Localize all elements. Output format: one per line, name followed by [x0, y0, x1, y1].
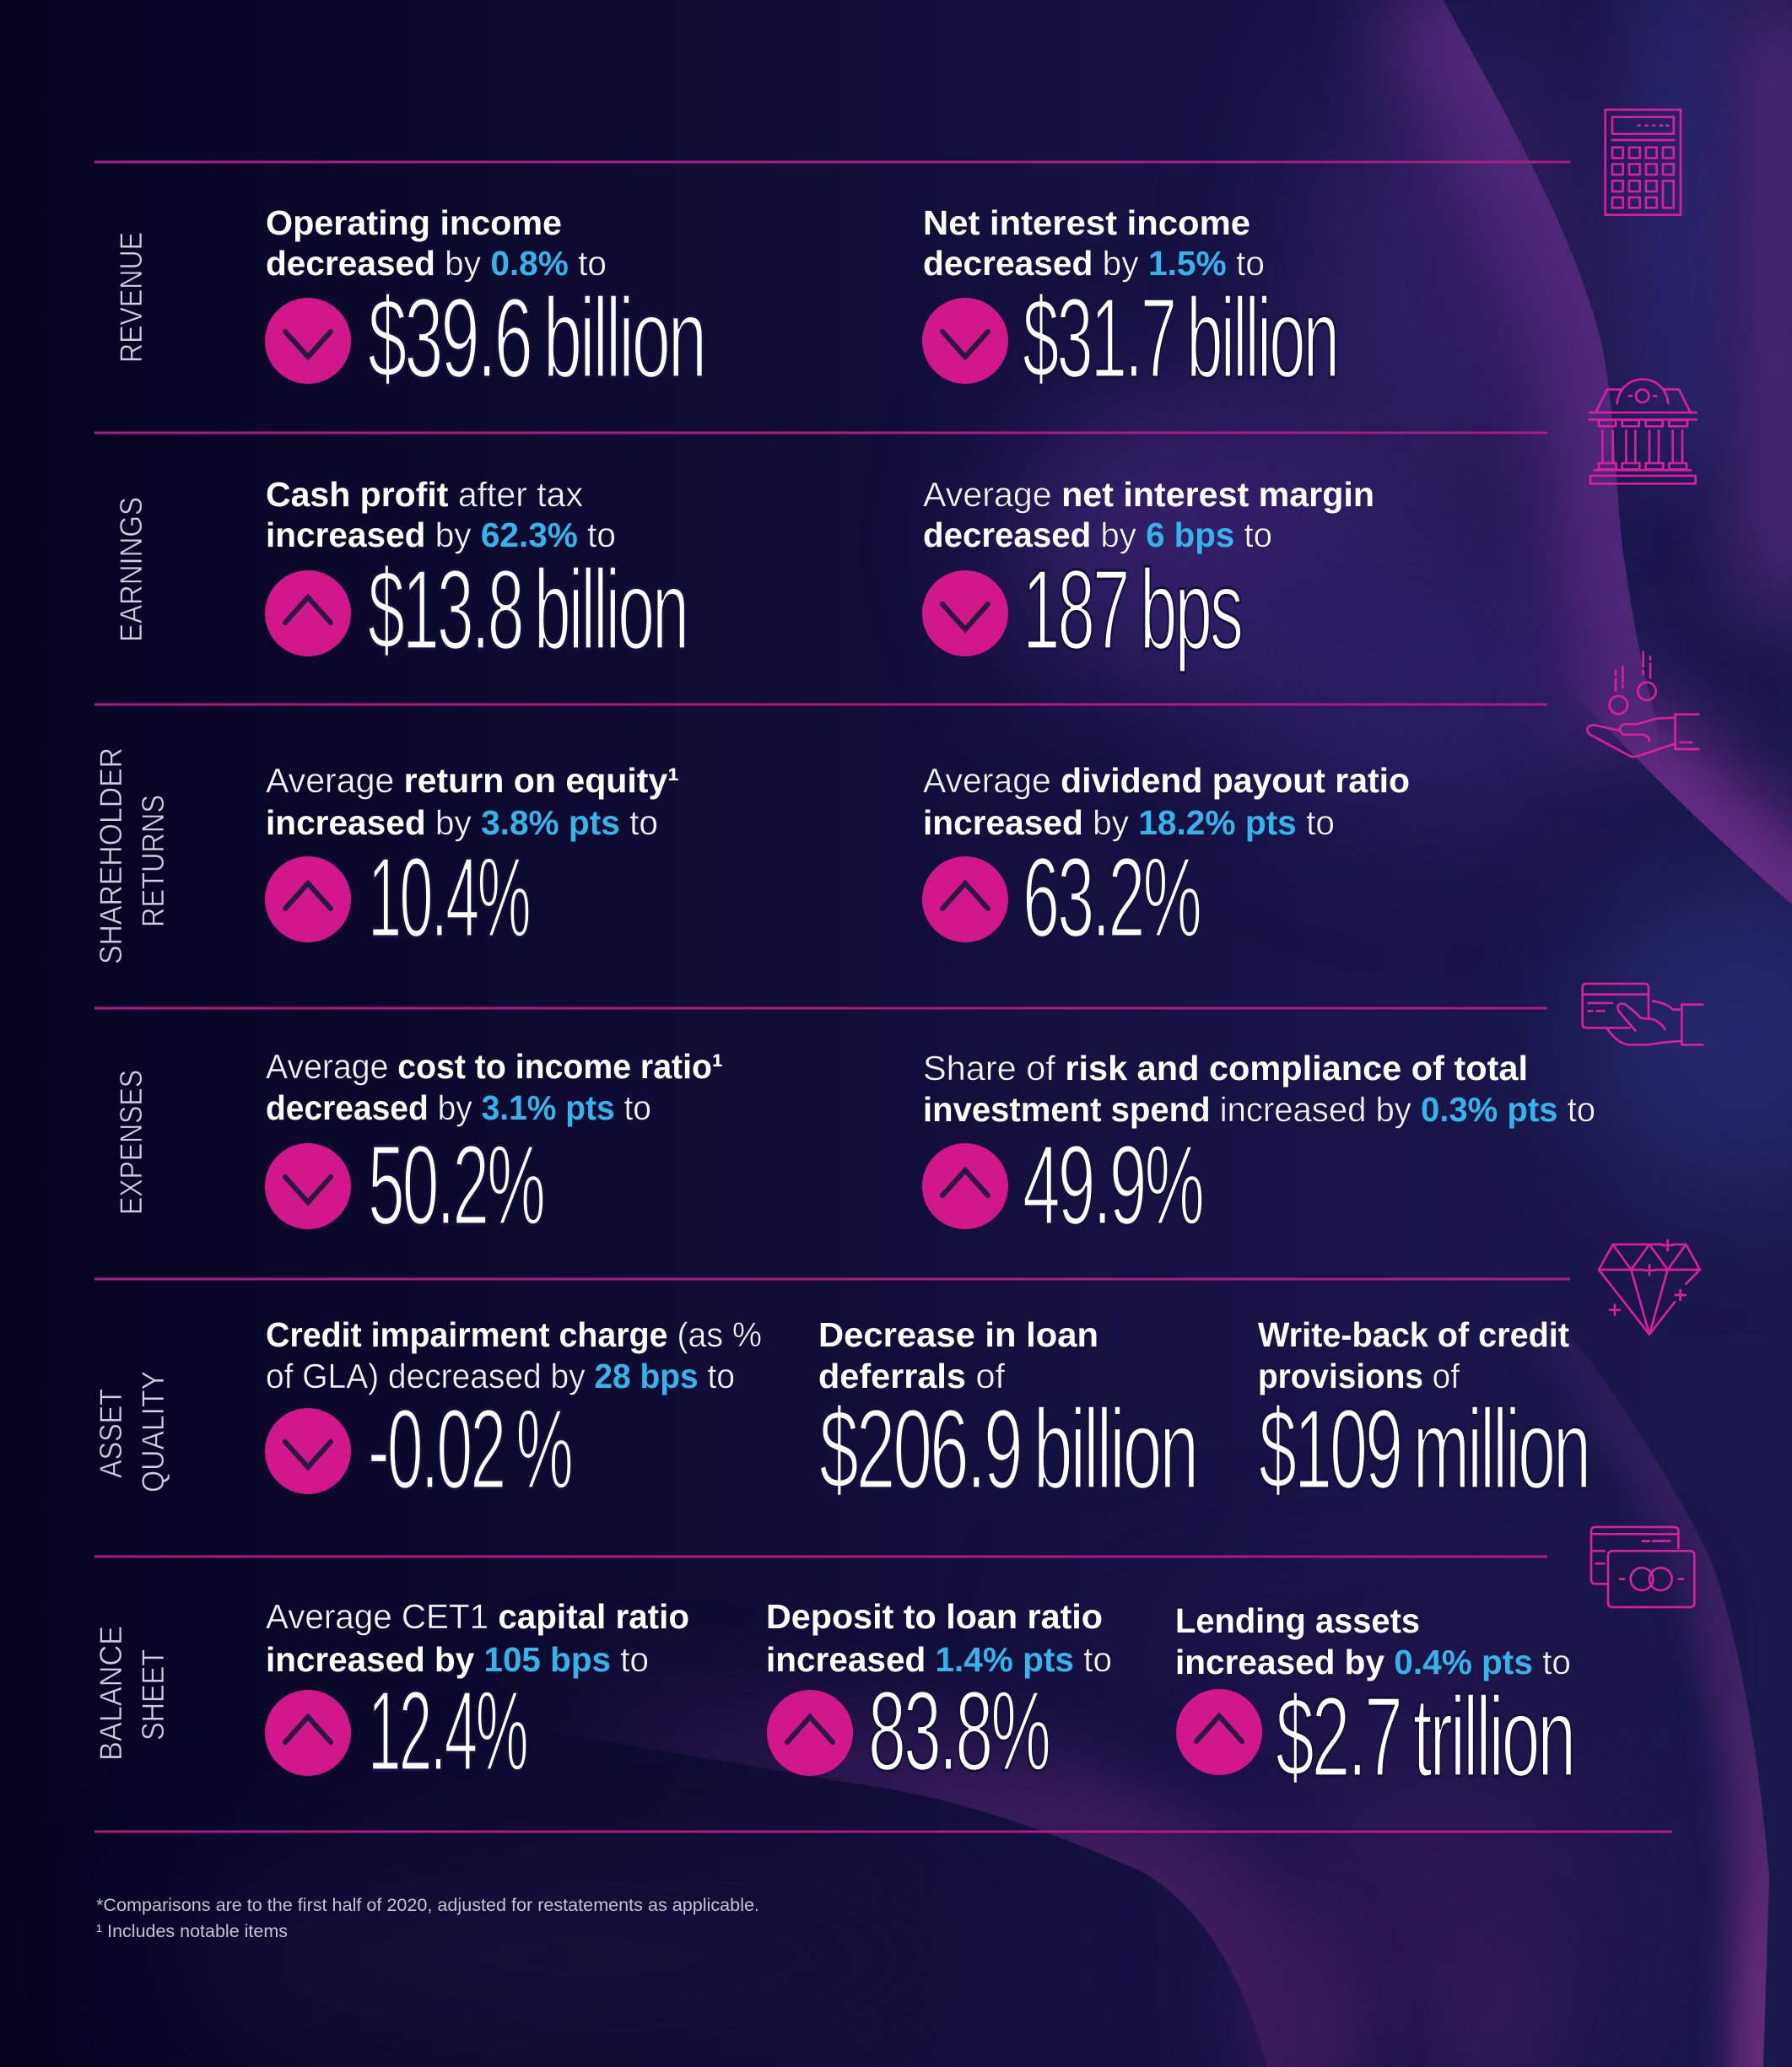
metric: risk and compliance investment share: [922, 1049, 1595, 1249]
metric: CET1 capital ratio: increased by 105 bps to: [266, 1640, 649, 1679]
metric: net interest income: $31.7 billion: [1023, 274, 1337, 402]
section label: asset quality: QUALITY: [136, 1371, 170, 1492]
section label: balance sheet: SHEET: [136, 1649, 170, 1740]
icon: hand holding card: [1583, 984, 1703, 1044]
icon: diamond: [1599, 1240, 1700, 1335]
metric: return on equity: 10.4%: [368, 834, 530, 961]
metric: decrease in loan deferrals: Decrease in loan: [818, 1315, 1098, 1354]
metric: net interest margin: 187 bps: [1023, 546, 1241, 673]
metric: cost to income ratio: decreased by 3.1% pts to: [266, 1088, 651, 1127]
icon: bank building: [1590, 380, 1697, 483]
icon: calculator: [1606, 110, 1681, 215]
metric: cash profit: increased by 62.3% to: [266, 515, 616, 554]
metric: return on equity: Average return on equity¹: [266, 761, 679, 800]
metric: dividend payout ratio: [922, 761, 1410, 961]
section label: asset quality: ASSET: [94, 1389, 128, 1478]
metric: return on equity: increased by 3.8% pts to: [266, 803, 658, 842]
metric: cost to income ratio: Average cost to income ratio¹: [266, 1047, 723, 1086]
metric: net interest margin: [922, 475, 1374, 673]
metric: net interest margin: decreased by 6 bps to: [923, 515, 1272, 554]
metric: lending assets: [1175, 1601, 1573, 1800]
footnotes: ¹ Includes notable items: [96, 1922, 288, 1941]
icon: hand catching coins: [1587, 652, 1698, 757]
metric: lending assets: Lending assets: [1175, 1601, 1420, 1640]
metric: write-back of credit provisions: Write-back of credit: [1258, 1315, 1569, 1354]
metric: deposit to loan ratio: Deposit to loan ratio: [766, 1597, 1103, 1636]
metric: decrease in loan deferrals: [818, 1315, 1196, 1513]
panel: balance sheet: [94, 1597, 1573, 1800]
metric: risk and compliance investment share: investment spend increased by 0.3% pts to: [923, 1090, 1595, 1129]
footnotes: [96, 1896, 759, 1941]
section label: earnings: EARNINGS: [114, 497, 148, 642]
metric: CET1 capital ratio: 12.4%: [368, 1667, 527, 1794]
metric: dividend payout ratio: increased by 18.2% pts to: [923, 803, 1335, 842]
section label: shareholder returns: [94, 747, 170, 964]
metric: deposit to loan ratio: increased 1.4% pts to: [766, 1640, 1112, 1679]
metric: cash profit: Cash profit after tax: [266, 475, 584, 514]
section label: shareholder returns: RETURNS: [136, 795, 170, 927]
panel: shareholder returns: [94, 747, 1410, 964]
metric: deposit to loan ratio: 83.8%: [868, 1667, 1050, 1794]
section label: asset quality: [94, 1371, 170, 1492]
metric: decrease in loan deferrals: deferrals of: [818, 1357, 1006, 1395]
section label: balance sheet: [94, 1626, 170, 1761]
metric: dividend payout ratio: 63.2%: [1023, 834, 1201, 961]
metric: risk and compliance investment share: Share of risk and compliance of total: [923, 1049, 1528, 1087]
metric: net interest income: decreased by 1.5% to: [923, 244, 1265, 283]
metric: credit impairment charge: [265, 1315, 762, 1513]
metric: risk and compliance investment share: 49.9%: [1023, 1121, 1203, 1249]
section label: revenue: REVENUE: [114, 232, 148, 363]
metric: operating income: decreased by 0.8% to: [266, 244, 607, 283]
metric: net interest income: Net interest income: [923, 203, 1250, 242]
icon: payment cards: [1591, 1527, 1694, 1607]
metric: CET1 capital ratio: [265, 1597, 689, 1794]
metric: dividend payout ratio: Average dividend payout ratio: [923, 761, 1410, 800]
metric: lending assets: increased by 0.4% pts to: [1175, 1643, 1571, 1681]
metric: credit impairment charge: -0.02 %: [368, 1385, 572, 1513]
metric: credit impairment charge: Credit impairment charge (as %: [266, 1315, 762, 1354]
metric: cash profit: $13.8 billion: [368, 546, 687, 673]
section label: expenses: EXPENSES: [114, 1070, 148, 1215]
panel: revenue: [114, 203, 1337, 402]
section label: shareholder returns: SHAREHOLDER: [94, 747, 128, 964]
metric: decrease in loan deferrals: $206.9 billion: [819, 1385, 1196, 1513]
metric: write-back of credit provisions: provisions of: [1258, 1357, 1460, 1395]
metric: operating income: Operating income: [266, 203, 562, 242]
metric: operating income: [265, 203, 704, 402]
metric: credit impairment charge: of GLA) decreased by 28 bps to: [266, 1357, 735, 1395]
metric: write-back of credit provisions: [1258, 1315, 1589, 1513]
metric: net interest income: [922, 203, 1337, 402]
metric: operating income: $39.6 billion: [368, 274, 704, 402]
metric: CET1 capital ratio: Average CET1 capital ratio: [266, 1597, 689, 1636]
metric: lending assets: $2.7 trillion: [1276, 1673, 1573, 1800]
metric: cost to income ratio: 50.2%: [368, 1121, 544, 1249]
footnotes: *Comparisons are to the first half of 2020, adjusted for restatements as applicable.: [96, 1896, 759, 1915]
metric: net interest margin: Average net interest margin: [923, 475, 1374, 514]
panel: asset quality: [94, 1315, 1589, 1513]
metric: cost to income ratio: [265, 1047, 723, 1249]
panel: expenses: [114, 1047, 1595, 1249]
metric: deposit to loan ratio: [766, 1597, 1112, 1794]
metric: return on equity: [265, 761, 679, 961]
metric: cash profit: [265, 475, 687, 673]
section label: balance sheet: BALANCE: [94, 1626, 128, 1761]
panel: earnings: [114, 475, 1374, 673]
